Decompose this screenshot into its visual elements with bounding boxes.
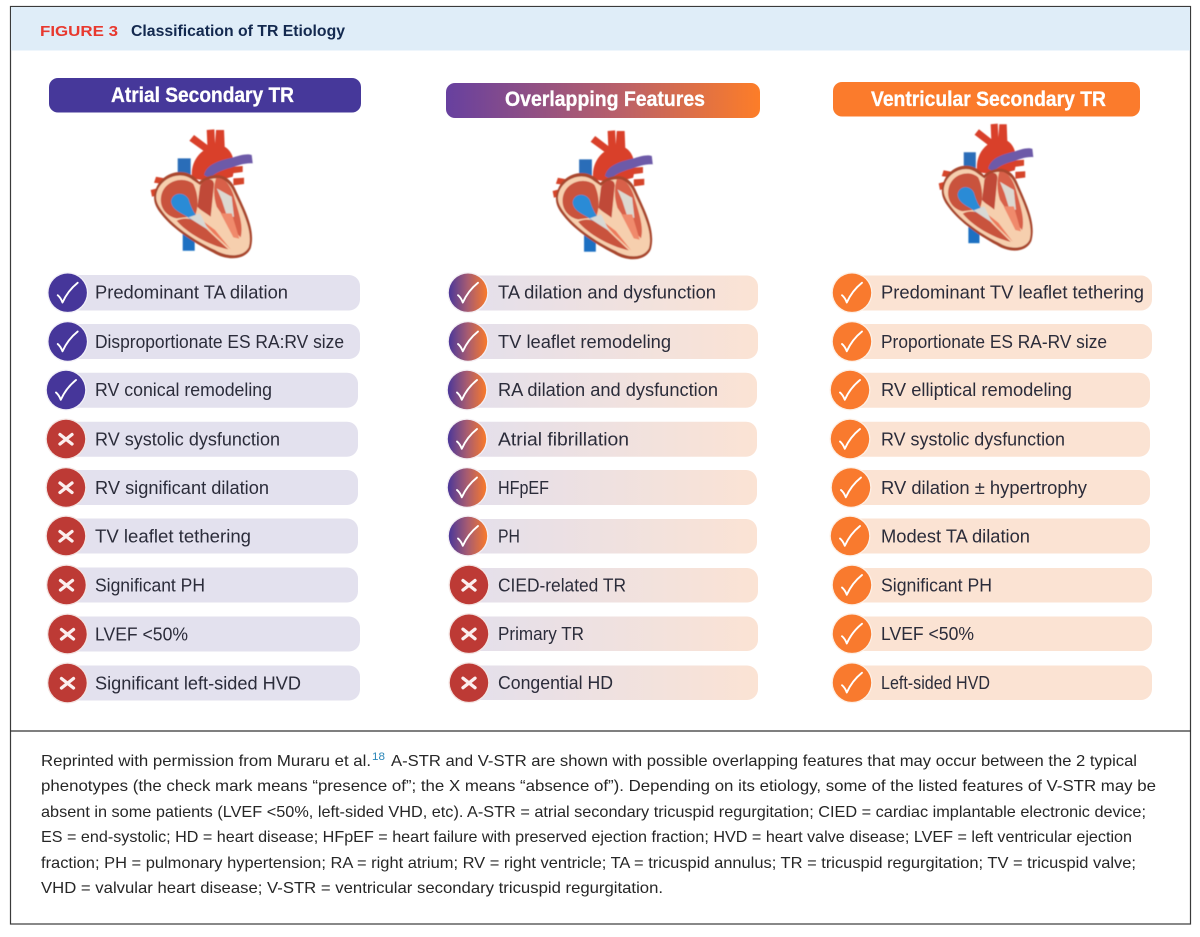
row: RV systolic dysfunction (830, 418, 1150, 460)
caption text block: A-STR and V-STR are shown with possible overlapping features that may occur between the 2 typical (391, 753, 1137, 770)
panel: overlapping features (446, 83, 760, 703)
caption text block (41, 751, 1156, 897)
row: LVEF <50%: LVEF <50% (95, 624, 188, 644)
row: RA dilation and dysfunction (446, 370, 757, 410)
row: TV leaflet tethering: TV leaflet tethering (95, 526, 251, 546)
row: TA dilation and dysfunction (448, 272, 758, 313)
row: Left-sided HVD (832, 662, 1152, 703)
row: TA dilation and dysfunction: TA dilation and dysfunction (498, 282, 716, 302)
row: PH (448, 516, 757, 556)
row: Significant PH: Significant PH (881, 574, 992, 596)
row: Significant PH (46, 564, 358, 606)
caption text block: Reprinted with permission from Muraru et al. (41, 753, 371, 770)
row: RA dilation and dysfunction: RA dilation and dysfunction (498, 379, 718, 400)
figure number: FIGURE 3 (40, 24, 118, 40)
caption text block: absent in some patients (LVEF <50%, left-sided VHD, etc). A-STR = atrial secondary tricuspid regurgitation; CIED = cardiac implantable electronic device; (41, 804, 1146, 821)
icon: heart (151, 129, 253, 258)
row: RV conical remodeling: RV conical remodeling (95, 379, 272, 400)
heading: ventricular secondary TR (833, 82, 1140, 116)
title: Classification of TR Etiology (131, 23, 345, 40)
row: Disproportionate ES RA:RV size: Disproportionate ES RA:RV size (95, 331, 344, 352)
row: RV elliptical remodeling: RV elliptical remodeling (881, 379, 1072, 400)
panel: ventricular secondary TR (830, 82, 1152, 703)
row: Predominant TV leaflet tethering (832, 272, 1152, 313)
caption text block: fraction; PH = pulmonary hypertension; RA = right atrium; RV = right ventricle; TA = tricuspid annulus; TR = tricuspid regurgitation; TV = tricuspid valve; (41, 855, 1136, 872)
row: Predominant TA dilation: Predominant TA dilation (95, 282, 288, 302)
row: RV dilation ± hypertrophy: RV dilation ± hypertrophy (881, 477, 1088, 498)
row: LVEF <50%: LVEF <50% (881, 623, 974, 644)
caption text block: VHD = valvular heart disease; V-STR = ventricular secondary tricuspid regurgitation. (41, 880, 663, 897)
heading: atrial secondary TR: Atrial Secondary TR (111, 84, 294, 107)
row: Modest TA dilation: Modest TA dilation (881, 526, 1030, 546)
heading: atrial secondary TR (49, 78, 361, 112)
row: LVEF <50% (832, 613, 1152, 654)
row: Primary TR (448, 613, 758, 654)
row: RV systolic dysfunction: RV systolic dysfunction (881, 428, 1065, 450)
row: RV significant dilation (46, 467, 358, 508)
row: Proportionate ES RA-RV size: Proportionate ES RA-RV size (881, 331, 1107, 352)
row: RV elliptical remodeling (830, 370, 1150, 410)
row: RV conical remodeling (46, 370, 358, 410)
row: TV leaflet remodeling: TV leaflet remodeling (498, 331, 671, 352)
row: TV leaflet tethering (46, 516, 358, 556)
row: Predominant TV leaflet tethering: Predominant TV leaflet tethering (881, 282, 1144, 302)
row: Proportionate ES RA-RV size (832, 321, 1152, 362)
row: Significant left-sided HVD (47, 662, 360, 704)
row: Congential HD (448, 662, 758, 703)
caption text block: ES = end-systolic; HD = heart disease; HFpEF = heart failure with preserved ejection fraction; HVD = heart valve disease; LVEF = left ventricular ejection (41, 829, 1132, 846)
row: Significant PH: Significant PH (95, 574, 205, 596)
row: RV systolic dysfunction (46, 418, 358, 460)
row: Disproportionate ES RA:RV size (47, 321, 360, 362)
row: Modest TA dilation (830, 516, 1150, 556)
row: Atrial fibrillation (446, 418, 757, 460)
row: LVEF <50% (47, 614, 360, 654)
heading: ventricular secondary TR: Ventricular Secondary TR (871, 88, 1106, 111)
heading: overlapping features (446, 83, 760, 118)
row: CIED-related TR (448, 564, 758, 606)
row: RV dilation ± hypertrophy (830, 467, 1150, 508)
row: Primary TR: Primary TR (498, 623, 584, 644)
row: Atrial fibrillation: Atrial fibrillation (498, 428, 629, 450)
row: Significant left-sided HVD: Significant left-sided HVD (95, 672, 301, 694)
row: HFpEF: HFpEF (498, 477, 549, 498)
row: RV systolic dysfunction: RV systolic dysfunction (95, 428, 280, 450)
row: Congential HD: Congential HD (498, 672, 613, 693)
panel: atrial secondary TR (46, 78, 361, 704)
row: Significant PH (832, 564, 1152, 606)
icon: heart (553, 130, 653, 259)
caption text block: 18 (372, 751, 385, 763)
heading: overlapping features: Overlapping Features (505, 88, 705, 111)
caption text block: phenotypes (the check mark means “presence of”; the X means “absence of”). Depending on its etiology, some of the listed features of V-STR may be (41, 778, 1156, 795)
row: HFpEF (446, 467, 757, 508)
row: Predominant TA dilation (47, 272, 360, 313)
icon: heart (939, 124, 1033, 251)
row: Left-sided HVD: Left-sided HVD (881, 672, 990, 693)
row: RV significant dilation: RV significant dilation (95, 477, 269, 498)
header band with figure title (11, 7, 1190, 50)
row: PH: PH (498, 526, 520, 546)
row: TV leaflet remodeling (448, 321, 758, 362)
row: CIED-related TR: CIED-related TR (498, 574, 626, 596)
